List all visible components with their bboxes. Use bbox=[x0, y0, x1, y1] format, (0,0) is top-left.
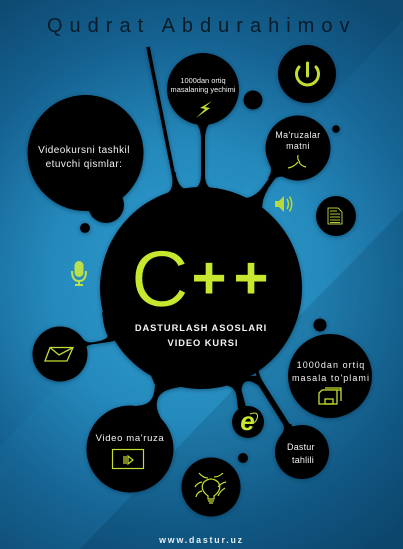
stalk: long line bbox=[148, 47, 188, 194]
bubble: small dot lower right bbox=[314, 318, 326, 332]
icon: power bbox=[296, 63, 319, 85]
bubble: envelope bbox=[32, 326, 88, 382]
text: program analysis bbox=[287, 442, 315, 465]
text: task collection bbox=[292, 360, 370, 383]
bubble: solutions bbox=[167, 53, 239, 125]
icon: document bbox=[328, 208, 342, 224]
heading: C++: + bbox=[234, 244, 269, 312]
icon: internet browser: e bbox=[240, 406, 255, 436]
text: lecture: matni bbox=[286, 141, 310, 151]
icon: video player bbox=[112, 450, 144, 468]
bubble: document bbox=[316, 196, 356, 236]
bubble: small dot bottom bbox=[238, 453, 248, 463]
text: solutions bbox=[171, 76, 236, 94]
text: solutions: 1000dan ortiq bbox=[180, 76, 226, 85]
text: course title: DASTURLASH ASOSLARI bbox=[135, 323, 267, 333]
text: course parts bbox=[38, 145, 130, 170]
stalk: envelope bbox=[82, 312, 125, 350]
icon: microphone bbox=[72, 261, 86, 285]
text: course parts: etuvchi qismlar: bbox=[46, 159, 122, 170]
text: solutions: masalaning yechimi bbox=[171, 85, 236, 94]
text: course title bbox=[135, 323, 267, 348]
bubble: small dot left bbox=[80, 223, 90, 233]
text: program analysis: tahlili bbox=[292, 455, 314, 465]
heading: C++: + bbox=[192, 244, 227, 312]
stalk: program analysis bbox=[255, 370, 300, 438]
bubble: bulb bbox=[182, 458, 240, 516]
text: lecture bbox=[275, 130, 321, 151]
heading: C++: C bbox=[131, 234, 189, 323]
bubble: task collection bbox=[288, 334, 372, 418]
text: task collection: 1000dan ortiq bbox=[297, 360, 365, 370]
heading: C++ bbox=[131, 234, 269, 323]
icon: radiation-like symbol bbox=[288, 155, 306, 168]
stalk: top bubble bbox=[190, 120, 216, 192]
stalk: browser bbox=[224, 376, 260, 409]
bubble: course parts lobe bbox=[84, 187, 124, 223]
bubble: lecture text bbox=[266, 116, 330, 180]
bubble: browser bbox=[232, 406, 264, 438]
icon: envelope bbox=[45, 348, 73, 361]
text: lecture: Ma'ruzalar bbox=[275, 130, 321, 140]
text: course title: VIDEO KURSI bbox=[168, 338, 238, 348]
text: course parts: Videokursni tashkil bbox=[38, 145, 130, 156]
icon: speaker bbox=[275, 196, 292, 212]
stalk: lecture bubble bbox=[244, 162, 288, 210]
icon: lightning bbox=[196, 101, 212, 118]
text: task collection: masala to'plami bbox=[292, 373, 370, 383]
bubble: course parts bbox=[28, 95, 144, 211]
black bubble network bbox=[28, 45, 372, 516]
bubble: power bbox=[278, 45, 336, 103]
icon: light bulb bbox=[195, 473, 226, 503]
icon: floppy disks bbox=[319, 388, 341, 404]
text: video lecture: Video ma'ruza bbox=[96, 433, 164, 444]
footer url: www.dastur.uz bbox=[158, 535, 244, 545]
title: Qudrat Abdurahimov bbox=[47, 15, 356, 37]
bubble: small dot right bbox=[332, 125, 340, 133]
bubble: program analysis bbox=[275, 425, 329, 479]
text: program analysis: Dastur bbox=[287, 442, 315, 452]
stalk: video lecture bbox=[135, 373, 190, 425]
bubble: small dot top bbox=[244, 90, 262, 110]
main circle bbox=[100, 187, 302, 389]
bubble: video lecture bbox=[86, 406, 174, 492]
